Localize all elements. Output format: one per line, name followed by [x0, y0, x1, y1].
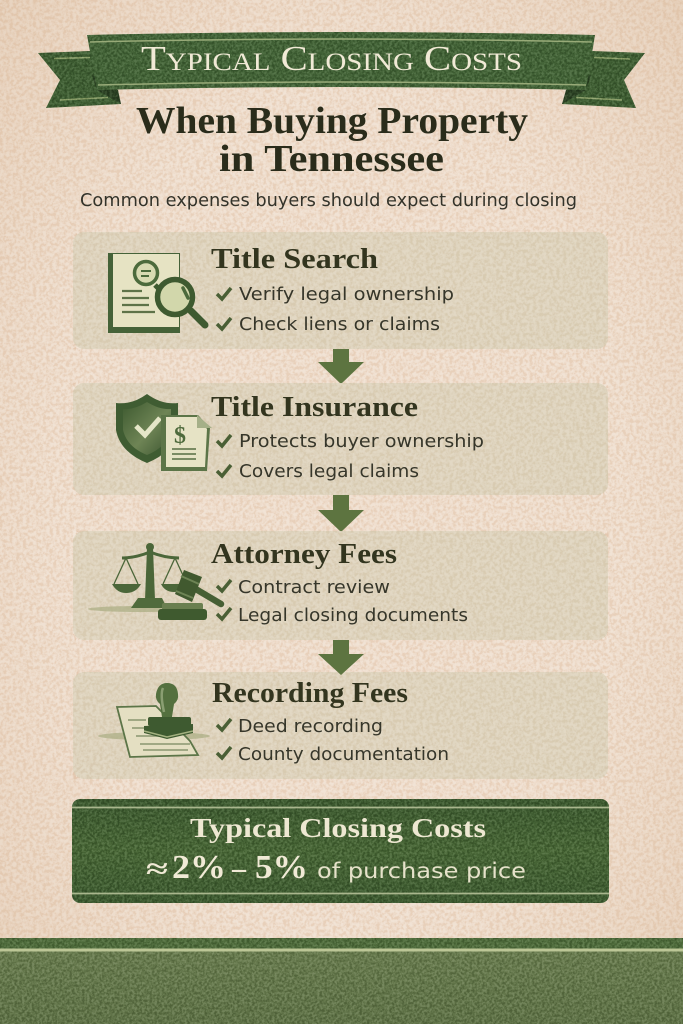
summary figure: of purchase price	[317, 859, 526, 883]
checklist: title search: Check liens or claims	[239, 314, 440, 335]
panel: title search	[73, 232, 608, 349]
checklist: recording fees: County documentation	[238, 744, 449, 765]
panel: attorney fees	[73, 531, 608, 640]
summary figure: ≈	[146, 854, 168, 885]
summary figure	[146, 849, 526, 886]
checklist: title search: Verify legal ownership	[239, 284, 454, 305]
checklist: attorney fees	[217, 577, 468, 626]
heading: title search: Title Search	[211, 244, 378, 275]
checklist: recording fees	[217, 716, 449, 765]
banner ribbon	[38, 29, 645, 109]
panel: title insurance	[73, 383, 608, 495]
checklist: attorney fees: Legal closing documents	[238, 605, 468, 626]
icon: shield and dollar document: $	[174, 423, 186, 449]
heading: attorney fees: Attorney Fees	[211, 539, 397, 570]
panel: recording fees	[73, 672, 608, 779]
ribbon main band	[87, 32, 595, 90]
arrow 1	[318, 349, 364, 384]
main heading: in Tennessee	[219, 138, 444, 180]
checklist: title insurance	[217, 431, 484, 482]
icon: scales and gavel	[88, 543, 221, 620]
checklist: attorney fees: Contract review	[238, 577, 390, 598]
icon: shield and dollar document	[116, 394, 212, 471]
summary heading: Typical Closing Costs	[190, 813, 486, 843]
panel: summary box	[72, 799, 609, 903]
arrow 2	[318, 495, 364, 532]
ribbon left tail	[38, 51, 121, 108]
summary figure: 5%	[255, 849, 308, 886]
main heading: When Buying Property	[136, 100, 528, 142]
checklist: recording fees: Deed recording	[238, 716, 383, 737]
heading: title insurance: Title Insurance	[211, 392, 418, 423]
footer band	[0, 938, 683, 1024]
summary figure: 2%	[172, 849, 226, 886]
ribbon right tail	[562, 51, 645, 108]
icon: document and magnifier	[108, 253, 205, 333]
heading: recording fees: Recording Fees	[212, 678, 408, 709]
checklist: title insurance: Covers legal claims	[239, 461, 419, 482]
checklist: title search	[217, 284, 454, 335]
checklist: title insurance: Protects buyer ownership	[239, 431, 484, 452]
subtitle: Common expenses buyers should expect during closing	[80, 191, 577, 211]
icon: stamp and deed	[98, 683, 210, 757]
ribbon title: Typical Closing Costs	[141, 39, 522, 78]
summary figure: –	[231, 852, 247, 885]
arrow 3	[318, 640, 364, 675]
main heading	[136, 100, 528, 180]
